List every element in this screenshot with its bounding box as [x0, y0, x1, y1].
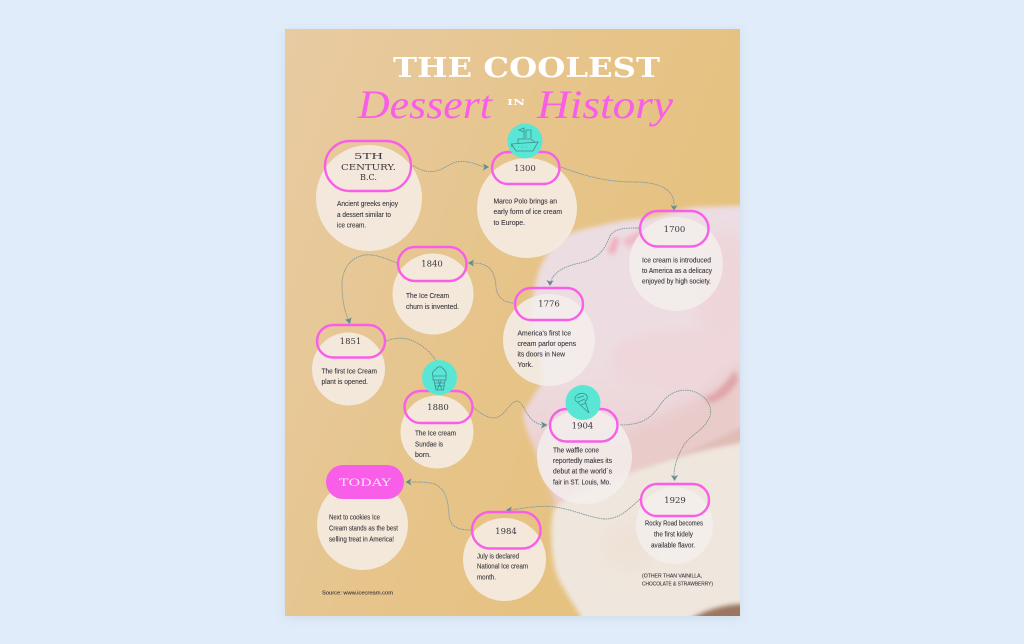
event: 5th century BC: a dessert similar to [337, 210, 391, 219]
photo: ice cream scoops [523, 205, 760, 625]
event: 5th century BC: Ancient greeks enjoy [337, 199, 398, 208]
connector: 1880 to 1904 [473, 401, 548, 428]
event: 1984: National Ice cream [477, 562, 528, 570]
event: 1776: America's first Ice [518, 328, 571, 337]
event: 1984 [463, 512, 546, 601]
note: other flavors: CHOCOLATE & STRAWBERRY) [642, 582, 713, 588]
event: 1300: Marco Polo brings an [494, 196, 557, 205]
event: 1776: cream parlor opens [518, 339, 576, 348]
event: 1840 [392, 247, 474, 334]
event: 1700: enjoyed by high society. [642, 276, 711, 286]
event: 1904: 1904 [572, 422, 593, 432]
event: 1851: plant is opened. [322, 377, 368, 386]
event: 1929: 1929 [664, 496, 686, 506]
icon: waffle cone [566, 385, 600, 420]
event: 1904: fair in ST. Louis, Mo. [553, 477, 611, 486]
source note: Source: www.icecream.com [322, 591, 393, 597]
event: 1700 [629, 211, 723, 311]
event: 1851: 1851 [340, 337, 361, 347]
connector: 1300 to 1700 [561, 167, 678, 210]
event: 1929 [636, 484, 713, 564]
event: 1300: 1300 [514, 164, 536, 174]
event: 1840: 1840 [421, 260, 443, 270]
connector: 1776 to 1840 [468, 260, 513, 303]
event: 1700: Ice cream is introduced [642, 255, 711, 264]
event: today: Cream stands as the best [329, 523, 398, 532]
event: 1880: Sundae is [415, 439, 443, 448]
connector: 1929 to 1984 [506, 499, 640, 519]
title: Dessert [357, 82, 493, 127]
event: 1904: reportedly makes its [553, 456, 612, 465]
connector: 1904 to 1929 [619, 390, 711, 481]
event: today: TODAY [339, 478, 392, 489]
event: 1984: 1984 [495, 527, 517, 537]
event: 1984: month. [477, 572, 496, 581]
event: 1776 [503, 288, 595, 386]
event: 1840: churn is invented. [406, 302, 459, 311]
event: 1840: The Ice Cream [406, 291, 449, 300]
event: 1904: The waffle cone [553, 445, 599, 454]
event: today: selling treat in America! [329, 534, 394, 543]
icon: ice cream cone [422, 360, 457, 395]
event: 1700: to America as a delicacy [642, 266, 712, 275]
title [357, 53, 673, 127]
event: 1880 [400, 391, 474, 468]
event: 5th century BC: ice cream. [337, 220, 366, 230]
connector: 1851 to 1880 [386, 338, 436, 361]
event: 1300 [477, 152, 577, 258]
event: 5th century BC: CENTURY. [341, 163, 396, 173]
event: 1776: 1776 [538, 300, 560, 310]
event: 1904: debut at the world´s [553, 466, 612, 475]
event: 1929: Rocky Road becomes [645, 518, 703, 527]
connector: 1700 to 1776 [546, 228, 639, 286]
note: other flavors: (OTHER THAN VAINILLA, [642, 574, 702, 580]
event: 1300: to Europe. [494, 218, 525, 227]
title: THE COOLEST [393, 53, 660, 84]
title: History [536, 82, 673, 127]
event: 1776: its doors in New [518, 350, 566, 358]
event: 1300: early form of ice cream [494, 207, 562, 216]
event: 5th century BC [316, 141, 422, 251]
event: 1851: The first Ice Cream [322, 366, 377, 375]
event: 1776: York. [518, 360, 533, 369]
event: 1880: The Ice cream [415, 428, 456, 437]
connector: 1984 to today [406, 478, 471, 530]
event: 1880: 1880 [427, 403, 449, 413]
event: 1700: 1700 [664, 225, 685, 235]
note: other flavors [642, 574, 713, 588]
connector: 1840 to 1851 [342, 255, 397, 324]
panel: poster background [285, 29, 740, 618]
event: 1851 [312, 325, 385, 406]
event: today [317, 465, 408, 570]
event: 1984: July is declared [477, 551, 519, 560]
event: 1880: born. [415, 450, 431, 459]
event: 5th century BC: 5TH [354, 152, 383, 162]
event: 5th century BC: B.C. [360, 173, 377, 183]
title: IN [507, 98, 525, 108]
event: 1929: the first kidely [654, 529, 693, 538]
event: 1904 [537, 409, 632, 504]
connector: 5th century to 1300 [413, 161, 489, 172]
event: 1929: available flavor. [651, 540, 695, 549]
icon: ship [508, 124, 542, 158]
event: today: Next to cookies Ice [329, 512, 380, 521]
